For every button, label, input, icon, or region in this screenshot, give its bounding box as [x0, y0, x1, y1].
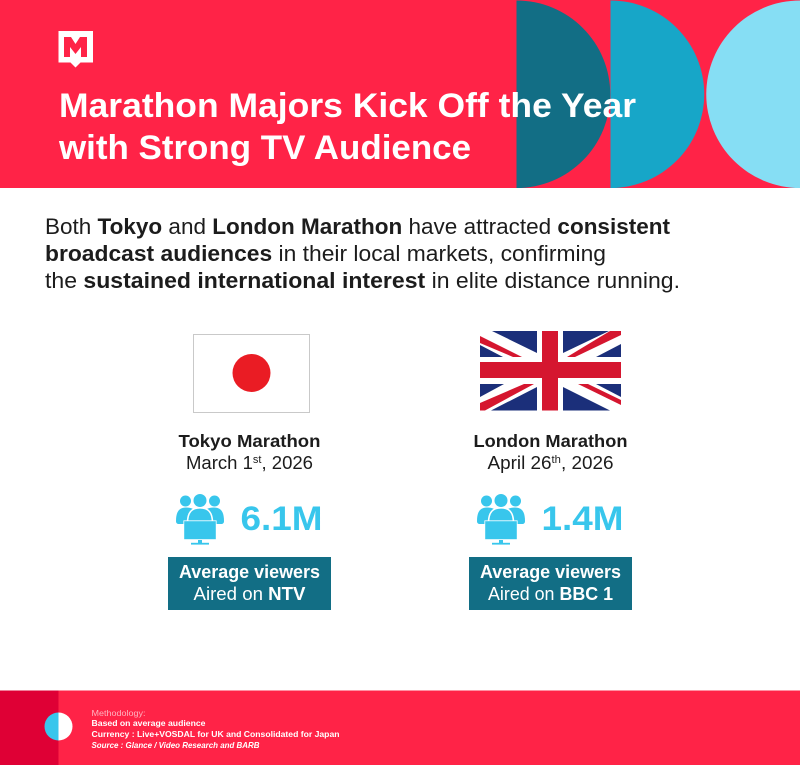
- methodology text: Source : Glance / Video Research and BARB: [92, 740, 260, 750]
- decorative shape: dark teal half circle: [516, 0, 610, 188]
- methodology text: Currency : Live+VOSDAL for UK and Consolidated for Japan: [92, 729, 340, 739]
- label box: London: Average viewers: [480, 562, 621, 582]
- panel: London Marathon: [469, 331, 632, 610]
- date: London: th: [552, 454, 561, 466]
- label box: London: Aired on BBC 1: [488, 584, 613, 604]
- icon: UK flag: [480, 331, 621, 410]
- intro text: broadcast audiences in their local markets, confirming: [45, 241, 606, 266]
- date: London: , 2026: [561, 452, 614, 473]
- heading: London Marathon: London Marathon: [474, 431, 628, 451]
- intro text: Both Tokyo and London Marathon have attracted consistent: [45, 214, 671, 239]
- decorative shape: blue half circle: [610, 0, 704, 188]
- panel: Tokyo Marathon: [168, 334, 331, 610]
- label box: Tokyo: [168, 557, 331, 610]
- decorative shape: light blue half circle: [706, 0, 800, 188]
- label box: London: [469, 557, 632, 610]
- title: Marathon Majors Kick Off the Year: [59, 87, 636, 125]
- label box: Tokyo: Aired on NTV: [194, 584, 306, 604]
- title: with Strong TV Audience: [58, 129, 471, 167]
- icon: audience watching screen: [176, 494, 224, 545]
- methodology text: Based on average audience: [92, 718, 206, 728]
- icon: logo: [58, 31, 93, 68]
- value: 1.4M: 1.4M: [542, 500, 624, 538]
- value: 6.1M: 6.1M: [240, 500, 322, 538]
- title: [58, 87, 636, 167]
- date: Tokyo: st: [253, 454, 261, 466]
- icon: Japan flag: [194, 334, 310, 412]
- methodology text: Methodology:: [92, 708, 146, 718]
- methodology text: [92, 708, 340, 750]
- panel: header: [0, 0, 800, 188]
- date: London: April 26: [488, 452, 550, 473]
- intro text: the sustained international interest in elite distance running.: [45, 268, 680, 293]
- date: Tokyo: March 1: [186, 452, 253, 473]
- panel: footer: [0, 690, 800, 765]
- icon: audience watching screen: [477, 494, 525, 545]
- intro text: [45, 214, 680, 293]
- label box: Tokyo: Average viewers: [179, 562, 320, 582]
- icon: half blue half white circle: [45, 712, 72, 740]
- date: Tokyo: , 2026: [261, 452, 313, 473]
- heading: Tokyo Marathon: Tokyo Marathon: [178, 431, 320, 451]
